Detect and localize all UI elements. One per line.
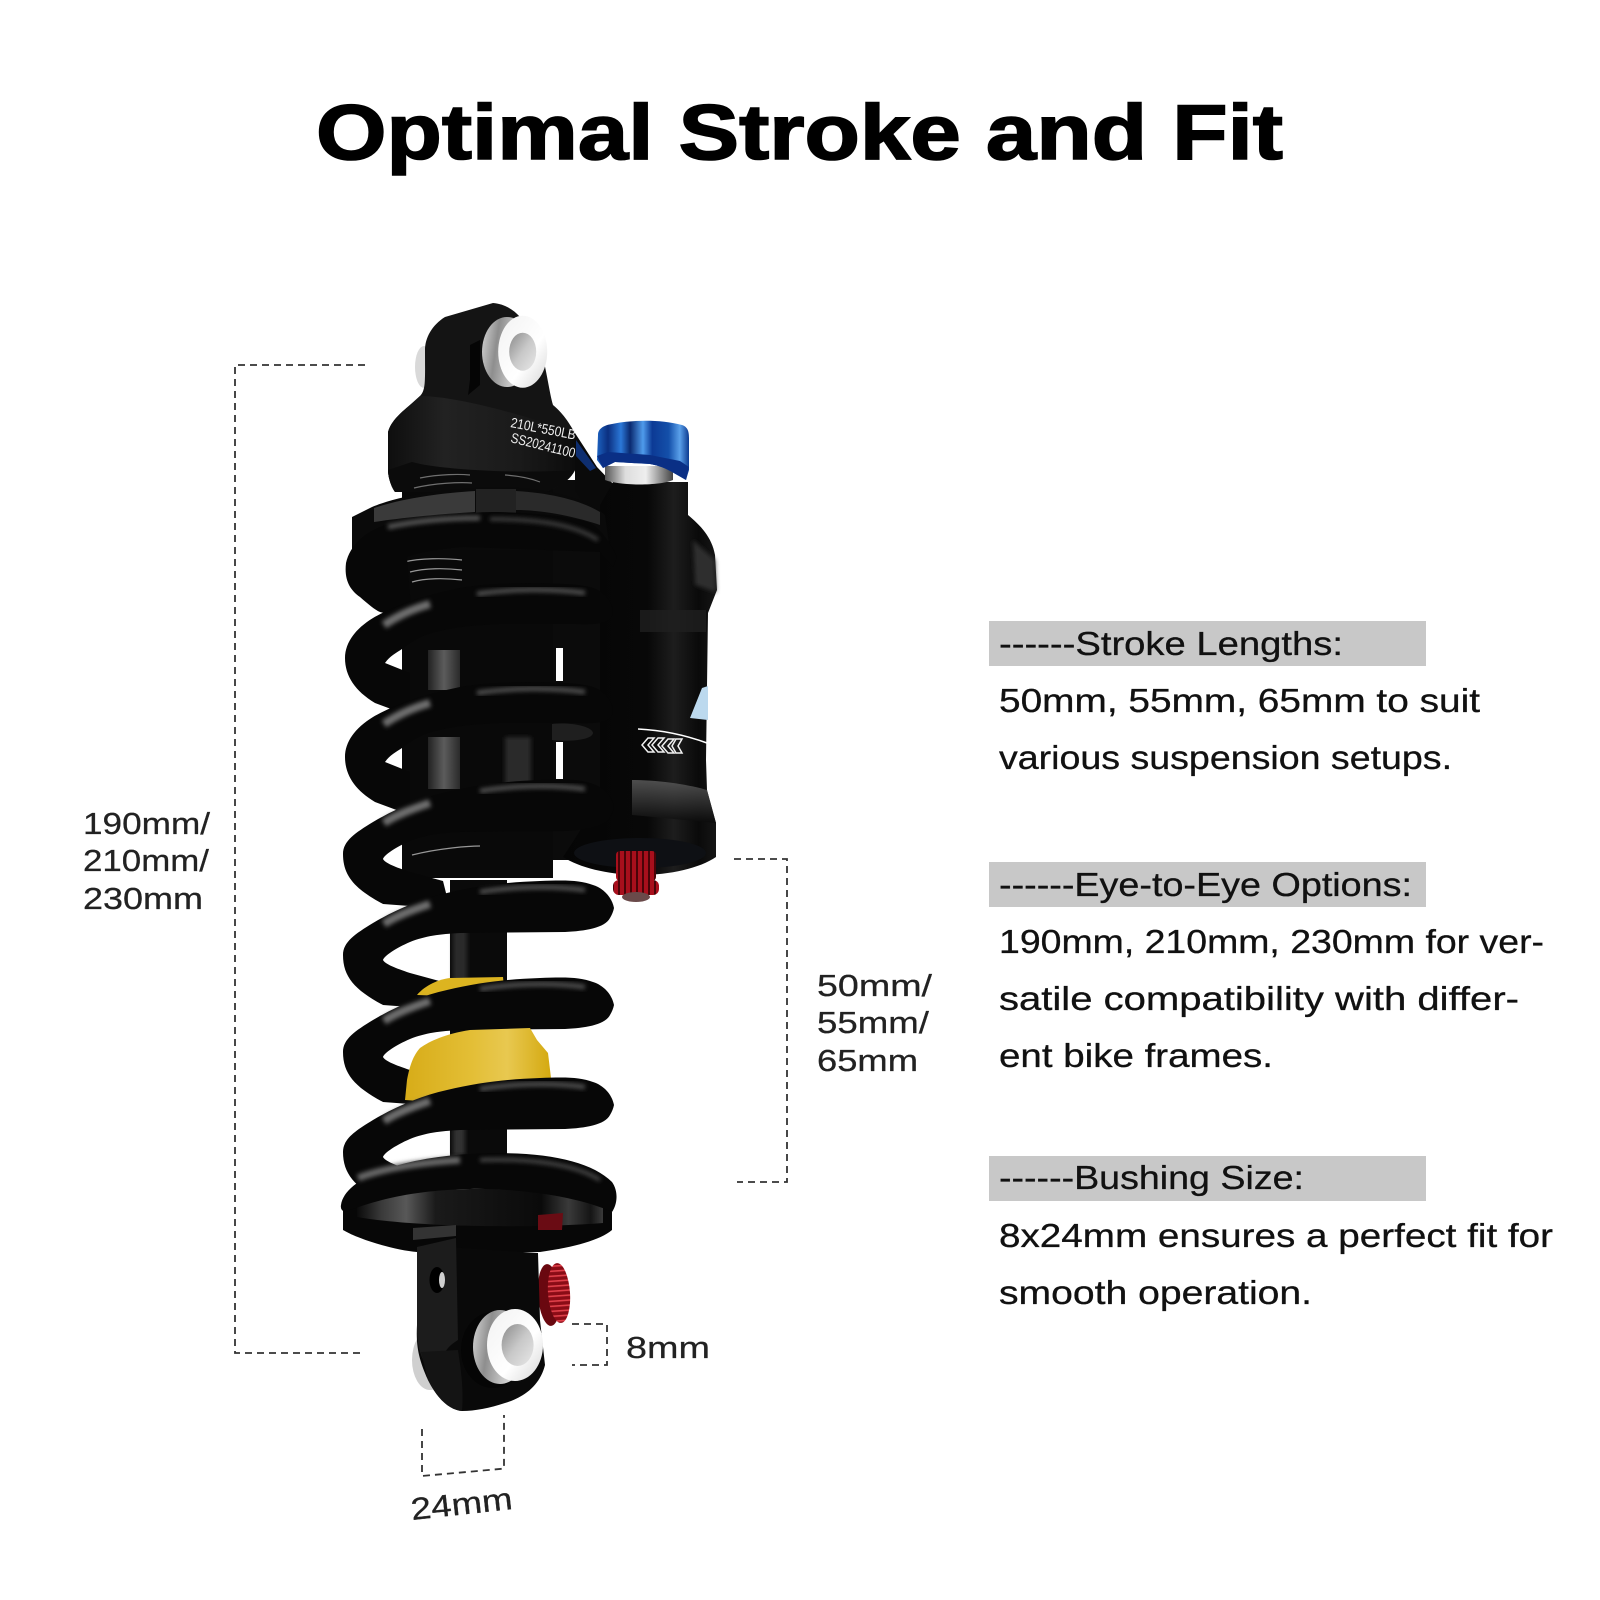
label: 24mm: 24mm — [409, 1481, 514, 1527]
reservoir cylinder — [563, 482, 717, 875]
description: 190mm, 210mm, 230mm for ver- — [999, 923, 1544, 960]
cap engraving: 210L*550LB — [509, 414, 577, 443]
dimension bracket: bushing width — [422, 1415, 504, 1476]
shock absorber illustration — [341, 303, 717, 1411]
heading bar — [989, 862, 1426, 907]
label: stroke lengths: 50mm/ — [817, 968, 932, 1003]
description: 8x24mm ensures a perfect fit for — [999, 1217, 1553, 1254]
label: eye-to-eye lengths — [83, 806, 210, 916]
arm bolt hole — [430, 1267, 444, 1293]
description — [999, 1217, 1553, 1311]
panel: stroke lengths — [989, 621, 1480, 776]
dimension bracket: stroke — [734, 859, 787, 1182]
coil 5 — [343, 880, 614, 1010]
lower mount eye — [412, 1238, 545, 1411]
label: eye-to-eye lengths: 230mm — [83, 881, 203, 916]
description: ent bike frames. — [999, 1037, 1273, 1074]
small yellow stop strip — [417, 977, 505, 998]
shock shaft — [450, 880, 507, 1160]
heading: ------Bushing Size: — [999, 1159, 1304, 1196]
reservoir logo — [690, 686, 708, 720]
reservoir chevrons — [642, 738, 682, 753]
panel: eye-to-eye options — [989, 862, 1544, 1074]
description: smooth operation. — [999, 1274, 1312, 1311]
title: Optimal Stroke and Fit — [316, 88, 1283, 176]
coil 2 — [345, 583, 613, 716]
description — [999, 923, 1544, 1074]
dimension bracket: bushing bore — [572, 1324, 607, 1365]
coil 6 — [343, 977, 614, 1107]
coil 1 — [346, 512, 617, 620]
red rebound knob — [613, 851, 659, 902]
heading bar — [989, 1156, 1426, 1201]
bridge from cap to reservoir — [575, 433, 625, 530]
label: stroke lengths: 65mm — [817, 1043, 918, 1078]
description: satile compatibility with differ- — [999, 980, 1519, 1017]
dimension bracket: overall length — [235, 365, 365, 1353]
upper mount eye — [388, 303, 577, 492]
cap engraving: SS20241100 — [509, 429, 577, 461]
heading: ------Eye-to-Eye Options: — [999, 866, 1412, 903]
coil 4 — [343, 779, 614, 909]
label: stroke lengths: 55mm/ — [817, 1005, 929, 1040]
label: eye-to-eye lengths: 190mm/ — [83, 806, 210, 841]
label: eye-to-eye lengths: 210mm/ — [83, 843, 209, 878]
description: various suspension setups. — [999, 739, 1452, 776]
coil 7 — [343, 1077, 614, 1207]
yellow bump stop — [405, 1028, 551, 1110]
label: 8mm: 8mm — [626, 1330, 710, 1365]
description: 50mm, 55mm, 65mm to suit — [999, 682, 1480, 719]
coil 8 — [341, 1153, 617, 1212]
reservoir stripe — [638, 729, 707, 743]
upper spring plate — [352, 487, 610, 550]
coil 3 — [345, 682, 613, 815]
description — [999, 682, 1480, 776]
lower spring plate — [343, 1189, 612, 1252]
cap engraving — [509, 414, 577, 461]
blue adjuster knob — [597, 421, 689, 484]
label: stroke lengths — [817, 968, 932, 1078]
threaded spring body — [402, 480, 600, 878]
heading: ------Stroke Lengths: — [999, 625, 1343, 662]
heading bar — [989, 621, 1426, 666]
coil spring — [343, 512, 617, 1207]
panel: bushing size — [989, 1156, 1553, 1311]
lower red knob — [536, 1262, 572, 1327]
